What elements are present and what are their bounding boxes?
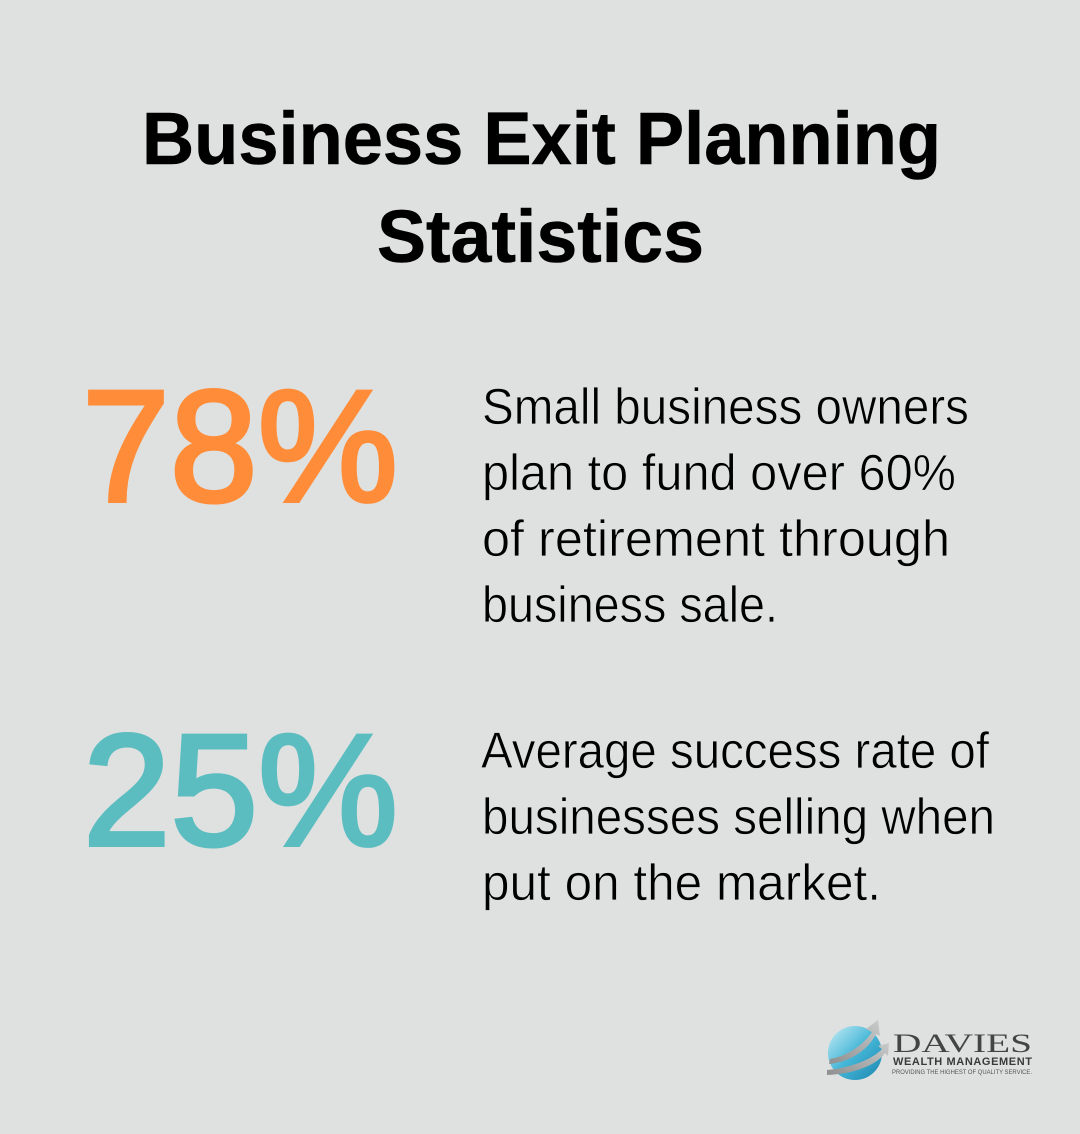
stat 1 description: Small business owners — [482, 378, 969, 435]
title: Business Exit Planning — [142, 97, 941, 180]
stat 1 description: of retirement through — [482, 510, 950, 567]
stat 2 description: businesses selling when — [482, 788, 995, 845]
title — [142, 97, 941, 278]
icon: globe with arrows — [827, 1020, 889, 1080]
title: Statistics — [377, 195, 704, 278]
stat number: 78%: 78% — [82, 357, 398, 535]
stat 2 description — [481, 722, 995, 911]
stat 1 description: business sale. — [482, 576, 778, 633]
stat 1: 78% — [82, 357, 969, 633]
stat 2 description: Average success rate of — [481, 722, 990, 779]
logo subtitle: WEALTH MANAGEMENT — [893, 1056, 1032, 1068]
logo: Davies Wealth Management — [827, 1020, 1032, 1080]
logo tagline: PROVIDING THE HIGHEST OF QUALITY SERVICE. — [892, 1069, 1032, 1076]
logo wordmark: DAVIES — [893, 1029, 1032, 1058]
stat 1 description: plan to fund over 60% — [482, 444, 956, 501]
stat 2: 25% — [83, 701, 995, 911]
stat 2 description: put on the market. — [482, 854, 881, 911]
stat 1 description — [482, 378, 969, 633]
stat number: 25%: 25% — [83, 701, 398, 879]
